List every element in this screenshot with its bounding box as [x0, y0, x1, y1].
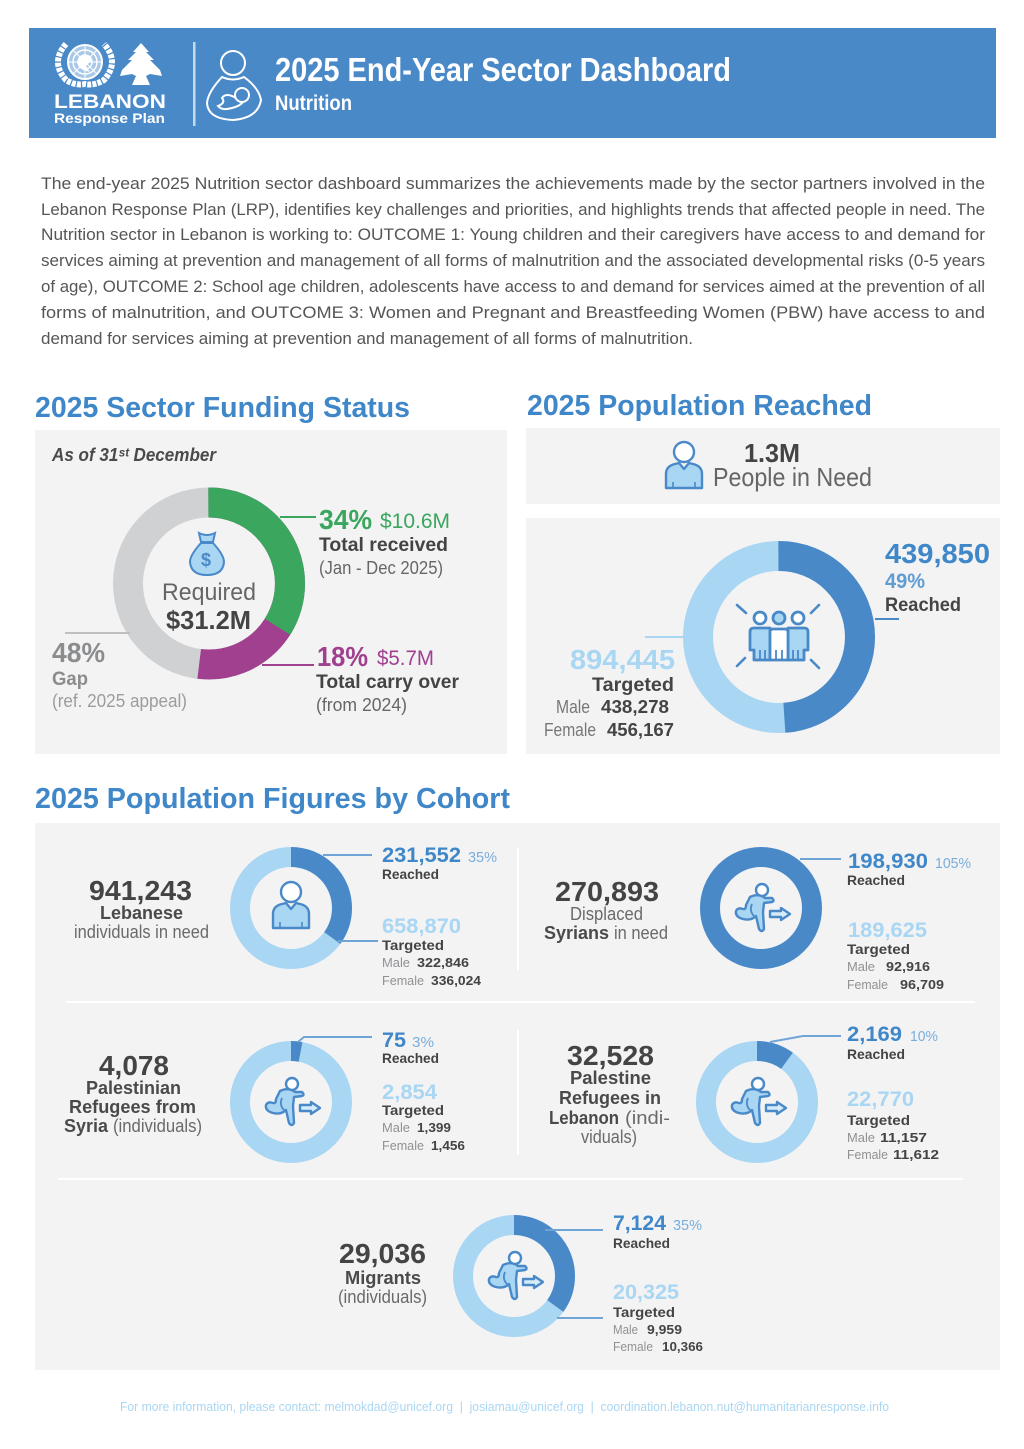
cohort: Palestinian Refugees from Syria [64, 1029, 465, 1153]
callout: total received: $10.6M [380, 510, 450, 533]
donut chart: PRL [706, 1051, 808, 1153]
callout: targeted: Female [544, 720, 596, 740]
stats: Lebanese: 658,870 [382, 915, 461, 938]
callout: targeted [544, 644, 675, 740]
figure: PRL: viduals) [581, 1127, 637, 1147]
intro paragraph: forms of malnutrition, and OUTCOME 3: Women and Pregnant and Breastfeeding Women (PBW) have access to and [41, 303, 985, 322]
callout: total received: Total received [319, 535, 448, 556]
stats: Migrants: Female [613, 1339, 653, 1354]
figure: Migrants: 29,036 [339, 1238, 426, 1269]
cohort: Palestine Refugees in Lebanon [549, 1023, 939, 1162]
callout: targeted: Targeted [592, 675, 674, 696]
callout: reached [885, 538, 990, 616]
stats: Migrants: Targeted [613, 1304, 675, 1320]
icon: displaced person [266, 1078, 320, 1125]
intro paragraph: Lebanon Response Plan (LRP), identifies key challenges and priorities, and highlights trends that affected people in need. The [41, 200, 985, 219]
callout: gap: Gap [52, 669, 88, 690]
callout: carry over: $5.7M [377, 647, 434, 670]
icon: mother and baby [207, 51, 261, 120]
label: required: Required [162, 579, 256, 606]
logo text: LEBANON: LEBANON [54, 92, 166, 113]
stats: Migrants: 7,124 [613, 1212, 666, 1235]
figure: PRS: Refugees from [69, 1097, 196, 1117]
figure: Migrants: Migrants [345, 1268, 421, 1288]
leader lines [280, 516, 316, 518]
callout: carry over: 18% [317, 641, 368, 672]
stats: Migrants: 35% [673, 1217, 702, 1234]
intro paragraph: of age), OUTCOME 2: School age children, adolescents have access to and demand for services aimed at the prevention of all [41, 277, 985, 296]
stats: PRL: 11,612 [893, 1147, 939, 1162]
stats: Syrians: 105% [935, 855, 971, 872]
donut chart: Syrians [710, 857, 812, 959]
heading: cohort figures: 2025 Population Figures by Cohort [35, 783, 510, 815]
stats: Syrians: Male [847, 959, 875, 974]
subtitle: Nutrition [275, 92, 352, 115]
panel: people in need [526, 428, 1000, 504]
cohort: Lebanese [74, 844, 497, 988]
stats: Lebanese: Male [382, 955, 410, 970]
intro paragraph [41, 174, 985, 348]
callout: targeted: 456,167 [607, 720, 674, 740]
callout: reached: 49% [885, 570, 925, 593]
figure: PRS: (individuals) [113, 1116, 202, 1136]
callout: gap: (ref. 2025 appeal) [52, 691, 187, 711]
title: 2025 End-Year Sector Dashboard [275, 51, 731, 88]
callout: reached: Reached [885, 595, 961, 616]
figure: PRL: Lebanon [549, 1108, 619, 1128]
icon: displaced person [732, 1078, 786, 1125]
stats: PRS: 2,854 [382, 1081, 437, 1104]
stats: Syrians: 189,625 [848, 919, 927, 942]
icon: group of people [737, 605, 819, 668]
figure: Lebanese in need [74, 875, 209, 942]
label: people in need: People in Need [713, 462, 872, 492]
stats: PRS [382, 1029, 465, 1153]
stats: PRL: Male [847, 1130, 875, 1145]
stats: Syrians [847, 850, 971, 992]
stats: PRL: Female [847, 1147, 888, 1162]
figure: PRL [549, 1040, 670, 1147]
figure: Syrians in need: Displaced [570, 904, 643, 924]
callout: carry over [316, 641, 460, 715]
callout: total received: 34% [319, 504, 372, 535]
stats: PRL [847, 1023, 939, 1162]
callout: total received: (Jan - Dec 2025) [319, 558, 443, 578]
stats: Migrants: Male [613, 1322, 638, 1337]
figure: Migrants [338, 1238, 427, 1307]
figure: PRL: Palestine [570, 1068, 651, 1088]
stats: PRS: 3% [412, 1034, 434, 1051]
icon: UN emblem [58, 44, 112, 84]
figure: Syrians in need: Syrians [544, 923, 609, 943]
icon: money bag [190, 533, 224, 575]
heading: population reached: 2025 Population Reached [527, 390, 872, 422]
stats: Syrians: 96,709 [900, 977, 944, 992]
panel: funding status [35, 430, 507, 754]
callout: targeted: 438,278 [601, 697, 669, 717]
figure: PRS: Syria [64, 1116, 109, 1136]
callout: targeted: 894,445 [570, 644, 675, 675]
donut chart: funding [128, 502, 290, 664]
figure: PRS: Palestinian [86, 1078, 181, 1098]
stats: PRS: Reached [382, 1050, 439, 1066]
callout: carry over: (from 2024) [316, 695, 407, 715]
intro paragraph: The end-year 2025 Nutrition sector dashboard summarizes the achievements made by the sector partners involved in the [41, 174, 985, 193]
stats: PRS: 75 [382, 1029, 406, 1052]
figure: PRL: Refugees in [559, 1088, 661, 1108]
cohort: Displaced Syrians [544, 850, 971, 992]
intro paragraph: demand for services aiming at prevention and management of all forms of malnutrition. [41, 329, 693, 348]
icon: money bag: $ [201, 550, 211, 570]
figure: Syrians in need [544, 876, 668, 943]
value: required amount: $31.2M [166, 605, 251, 635]
stats: Migrants: Reached [613, 1235, 670, 1251]
callout: total received [319, 504, 450, 578]
stats: Syrians: 92,916 [886, 959, 930, 974]
stats: PRL: 22,770 [847, 1088, 914, 1111]
stats: Lebanese: 322,846 [417, 955, 469, 970]
stats: PRL: 2,169 [847, 1023, 902, 1046]
stats: PRL: Targeted [847, 1112, 910, 1128]
stats: Lebanese: Targeted [382, 937, 444, 953]
stats: Migrants [613, 1212, 703, 1354]
stats: Syrians: Female [847, 977, 888, 992]
donut chart: reached [698, 556, 860, 718]
logo text: Response Plan: Response Plan [54, 110, 165, 126]
figure: Syrians in need: in need [614, 923, 668, 943]
stats: Syrians: Reached [847, 872, 905, 888]
callout: reached: 439,850 [885, 538, 990, 569]
figure: PRL: 32,528 [567, 1040, 654, 1071]
figure: Lebanese in need: Lebanese [100, 903, 183, 923]
stats: PRS: Female [382, 1138, 424, 1153]
stats: PRS: 1,456 [431, 1138, 465, 1153]
donut chart: Lebanese [240, 857, 342, 959]
icon: person [666, 442, 702, 488]
stats: PRL: 11,157 [880, 1130, 927, 1145]
heading: funding status: 2025 Sector Funding Status [35, 392, 410, 424]
stats: Migrants: 9,959 [647, 1322, 682, 1337]
icon: displaced person [736, 884, 790, 931]
callout: gap: 48% [52, 637, 105, 668]
intro paragraph: Nutrition sector in Lebanon is working to: OUTCOME 1: Young children and their caregivers have access to and demand for [41, 225, 985, 244]
callout: gap [52, 637, 187, 711]
figure: PRS [64, 1050, 202, 1136]
stats: Migrants: 10,366 [662, 1339, 703, 1354]
stats: PRS: Targeted [382, 1102, 444, 1118]
icon: displaced person [489, 1252, 543, 1299]
figure: Syrians in need: 270,893 [555, 876, 659, 907]
figure: PRL: (indi- [625, 1108, 670, 1128]
donut chart: PRS [240, 1051, 342, 1153]
stats: Lebanese: 336,024 [431, 973, 482, 988]
header banner [29, 28, 996, 138]
callout: carry over: Total carry over [316, 672, 460, 693]
panel: population reached [526, 518, 1000, 754]
figure: Lebanese in need: 941,243 [89, 875, 192, 906]
donut chart: Migrants [463, 1225, 565, 1327]
figure: Migrants: (individuals) [338, 1287, 427, 1307]
footer contact line: For more information, please contact: melmokdad@unicef.org | josiamau@unicef.org | coordination.lebanon.nut@humanitarianresponse.info [120, 1399, 889, 1414]
panel: cohort figures [35, 823, 1000, 1370]
intro paragraph: services aiming at prevention and management of all forms of malnutrition and the associated developmental risks (0-5 years [41, 251, 985, 270]
stats: PRS: 1,399 [417, 1120, 451, 1135]
stats: PRS: Male [382, 1120, 410, 1135]
value: people in need: 1.3M [744, 438, 800, 468]
stats: Syrians: Targeted [847, 941, 910, 957]
stats: PRL: Reached [847, 1046, 905, 1062]
stats: Lebanese [382, 844, 497, 988]
stats: Migrants: 20,325 [613, 1281, 679, 1304]
date note: As of 31ˢᵗ December [51, 445, 217, 465]
cohort: Migrants [338, 1212, 703, 1354]
icon: cedar tree [120, 43, 162, 85]
stats: Lebanese: 35% [468, 849, 497, 866]
stats: Lebanese: Reached [382, 866, 439, 882]
stats: PRL: 10% [910, 1028, 938, 1045]
stats: Lebanese: Female [382, 973, 424, 988]
stats: Syrians: 198,930 [848, 850, 928, 873]
figure: PRS: 4,078 [99, 1050, 169, 1081]
callout: targeted: Male [556, 697, 590, 717]
icon: person [273, 882, 309, 928]
stats: Lebanese: 231,552 [382, 844, 461, 867]
figure: Lebanese in need: individuals in need [74, 922, 209, 942]
